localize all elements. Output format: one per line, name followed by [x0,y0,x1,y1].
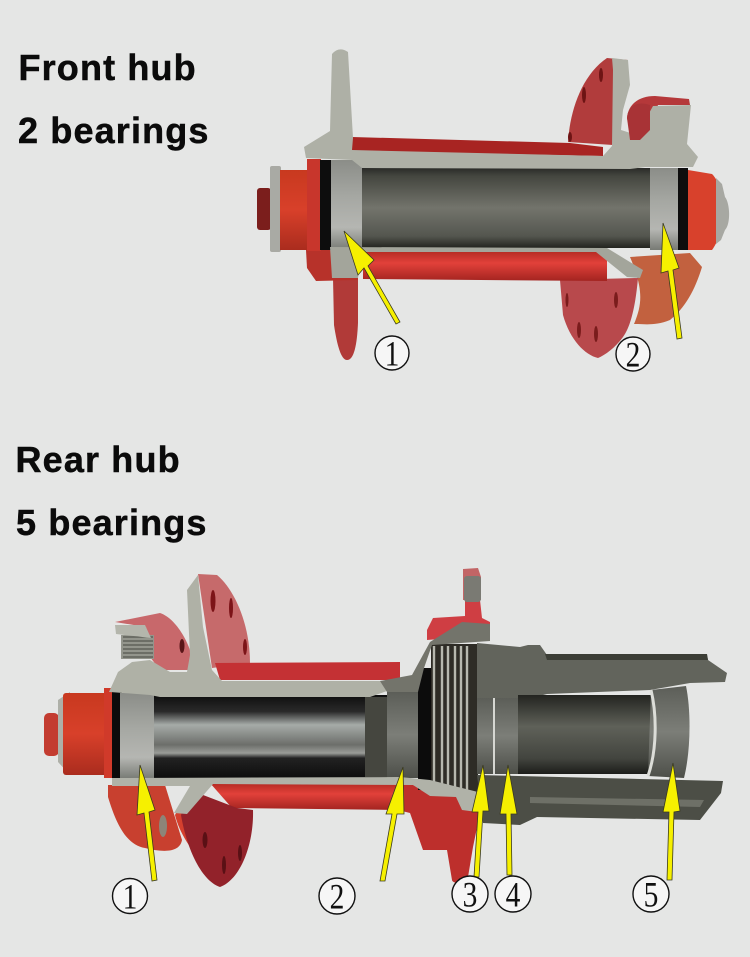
label: rear 4: 4 [506,876,520,915]
front hub: bearing 1 [331,160,362,250]
arrow: rear bearing 4 [500,765,517,875]
front hub illustration [257,49,729,375]
front hub: upper right flange spoke holes [568,68,603,142]
rear hub: lower disc holes [202,832,242,874]
rear hub: bearing 4 [495,698,519,774]
arrow: rear bearing 1 [137,765,157,881]
front hub: left nut [280,170,310,250]
rear hub: left red spacer [104,688,114,778]
label: front 1 [375,335,409,374]
rear hub: upper red tube [215,662,400,680]
rear hub: lower right red body [398,783,480,884]
front hub: cut section bottom [330,247,643,278]
rear hub: bearing divider [493,698,495,774]
rear hub: washer [58,692,70,775]
rear hub: gray lower section [112,777,478,814]
rear hub: freehub top edge [545,654,708,660]
arrow: front bearing 2 [661,223,682,339]
front hub: upper red tube [352,137,603,156]
label: rear 3 [452,876,488,915]
rear hub: ratchet ring [431,644,478,792]
front hub: lower right flange and rear disc [560,253,702,358]
rear hub: freehub upper shell [477,643,727,700]
rear hub: lower tube [210,783,398,810]
rear hub: axle end [44,713,59,756]
front hub: right lug [627,96,690,142]
label: front 1: 1 [385,335,399,374]
rear hub: upper left flange [198,574,250,668]
front hub: washer left [270,166,281,252]
rear hub: cylinder [518,695,651,774]
heading: rear hub: Rear hub [16,439,181,480]
rear hub: top right flange tip [463,568,481,600]
arrow: rear bearing 5 [663,763,680,880]
rear hub: bearing 3 [477,698,494,774]
rear hub: lower lug hole [159,815,167,837]
rear hub: lower disc [181,790,253,887]
label: front 2: 2 [626,336,640,375]
rear hub: bearing 5 highlight [648,690,655,776]
front hub: left red spacer [307,159,321,251]
heading: rear hub bearing count: 5 bearings [16,502,208,543]
rear hub: bearing 2 [387,692,419,778]
front hub: axle end left [257,188,271,230]
rear hub: top right flange section [464,576,481,602]
rear hub: dark shell shoulder [380,622,490,692]
rear hub: left lug [115,613,192,670]
label: rear 5 [633,876,669,915]
rear hub: left black seal [112,691,122,778]
rear hub: bearing 1 [120,693,154,779]
rear hub: flange top red [427,600,490,640]
front hub: right washer and axle end [716,178,729,244]
rear hub illustration [44,568,727,917]
heading: front hub: Front hub [18,47,197,88]
arrow: rear bearing 2 [380,767,404,881]
front hub: right black seal [678,168,688,250]
front hub: upper right flange [568,58,628,145]
rear hub: lower disc orange edge [175,790,200,860]
front hub: cut section top [304,49,698,169]
label: rear 3: 3 [463,876,477,915]
rear hub: black gap [418,668,432,790]
arrow: front bearing 1 [344,231,400,324]
rear hub: freehub lower shell [477,775,723,825]
rear hub: lower shell band [530,797,704,807]
label: rear 1: 1 [123,878,137,917]
front hub: lower left flange [333,278,358,360]
label: rear 5: 5 [644,876,658,915]
rear hub: lug hole [180,639,184,653]
rear hub: flange spoke holes [210,590,247,655]
rear hub: gray top section [109,575,387,697]
label: rear 2 [319,878,355,917]
rear hub: threaded bolt [121,635,154,659]
heading: front hub bearing count: 2 bearings [18,110,210,151]
rear hub: inner axle [154,695,388,778]
rear hub: bearing 5 [648,686,690,778]
label: rear 4 [495,876,531,915]
rear hub: lug tip [115,625,151,638]
front hub: lug cutout [627,104,650,140]
label: rear 2: 2 [330,878,344,917]
rear hub: lower left lug [108,785,182,851]
arrow: rear bearing 3 [472,765,489,877]
front hub: right red nut [688,170,722,250]
front hub: bearing 2 [650,168,679,250]
label: rear 1 [112,878,148,917]
front hub: inner axle cylinder [362,168,650,248]
front hub: left black seal [320,160,331,250]
front hub: lower left red collar [306,250,358,281]
label: front 2 [616,336,650,375]
rear hub: left nut [63,693,107,775]
front hub: lower red tube [363,251,607,281]
rear hub: axle spacer ring [365,697,389,777]
